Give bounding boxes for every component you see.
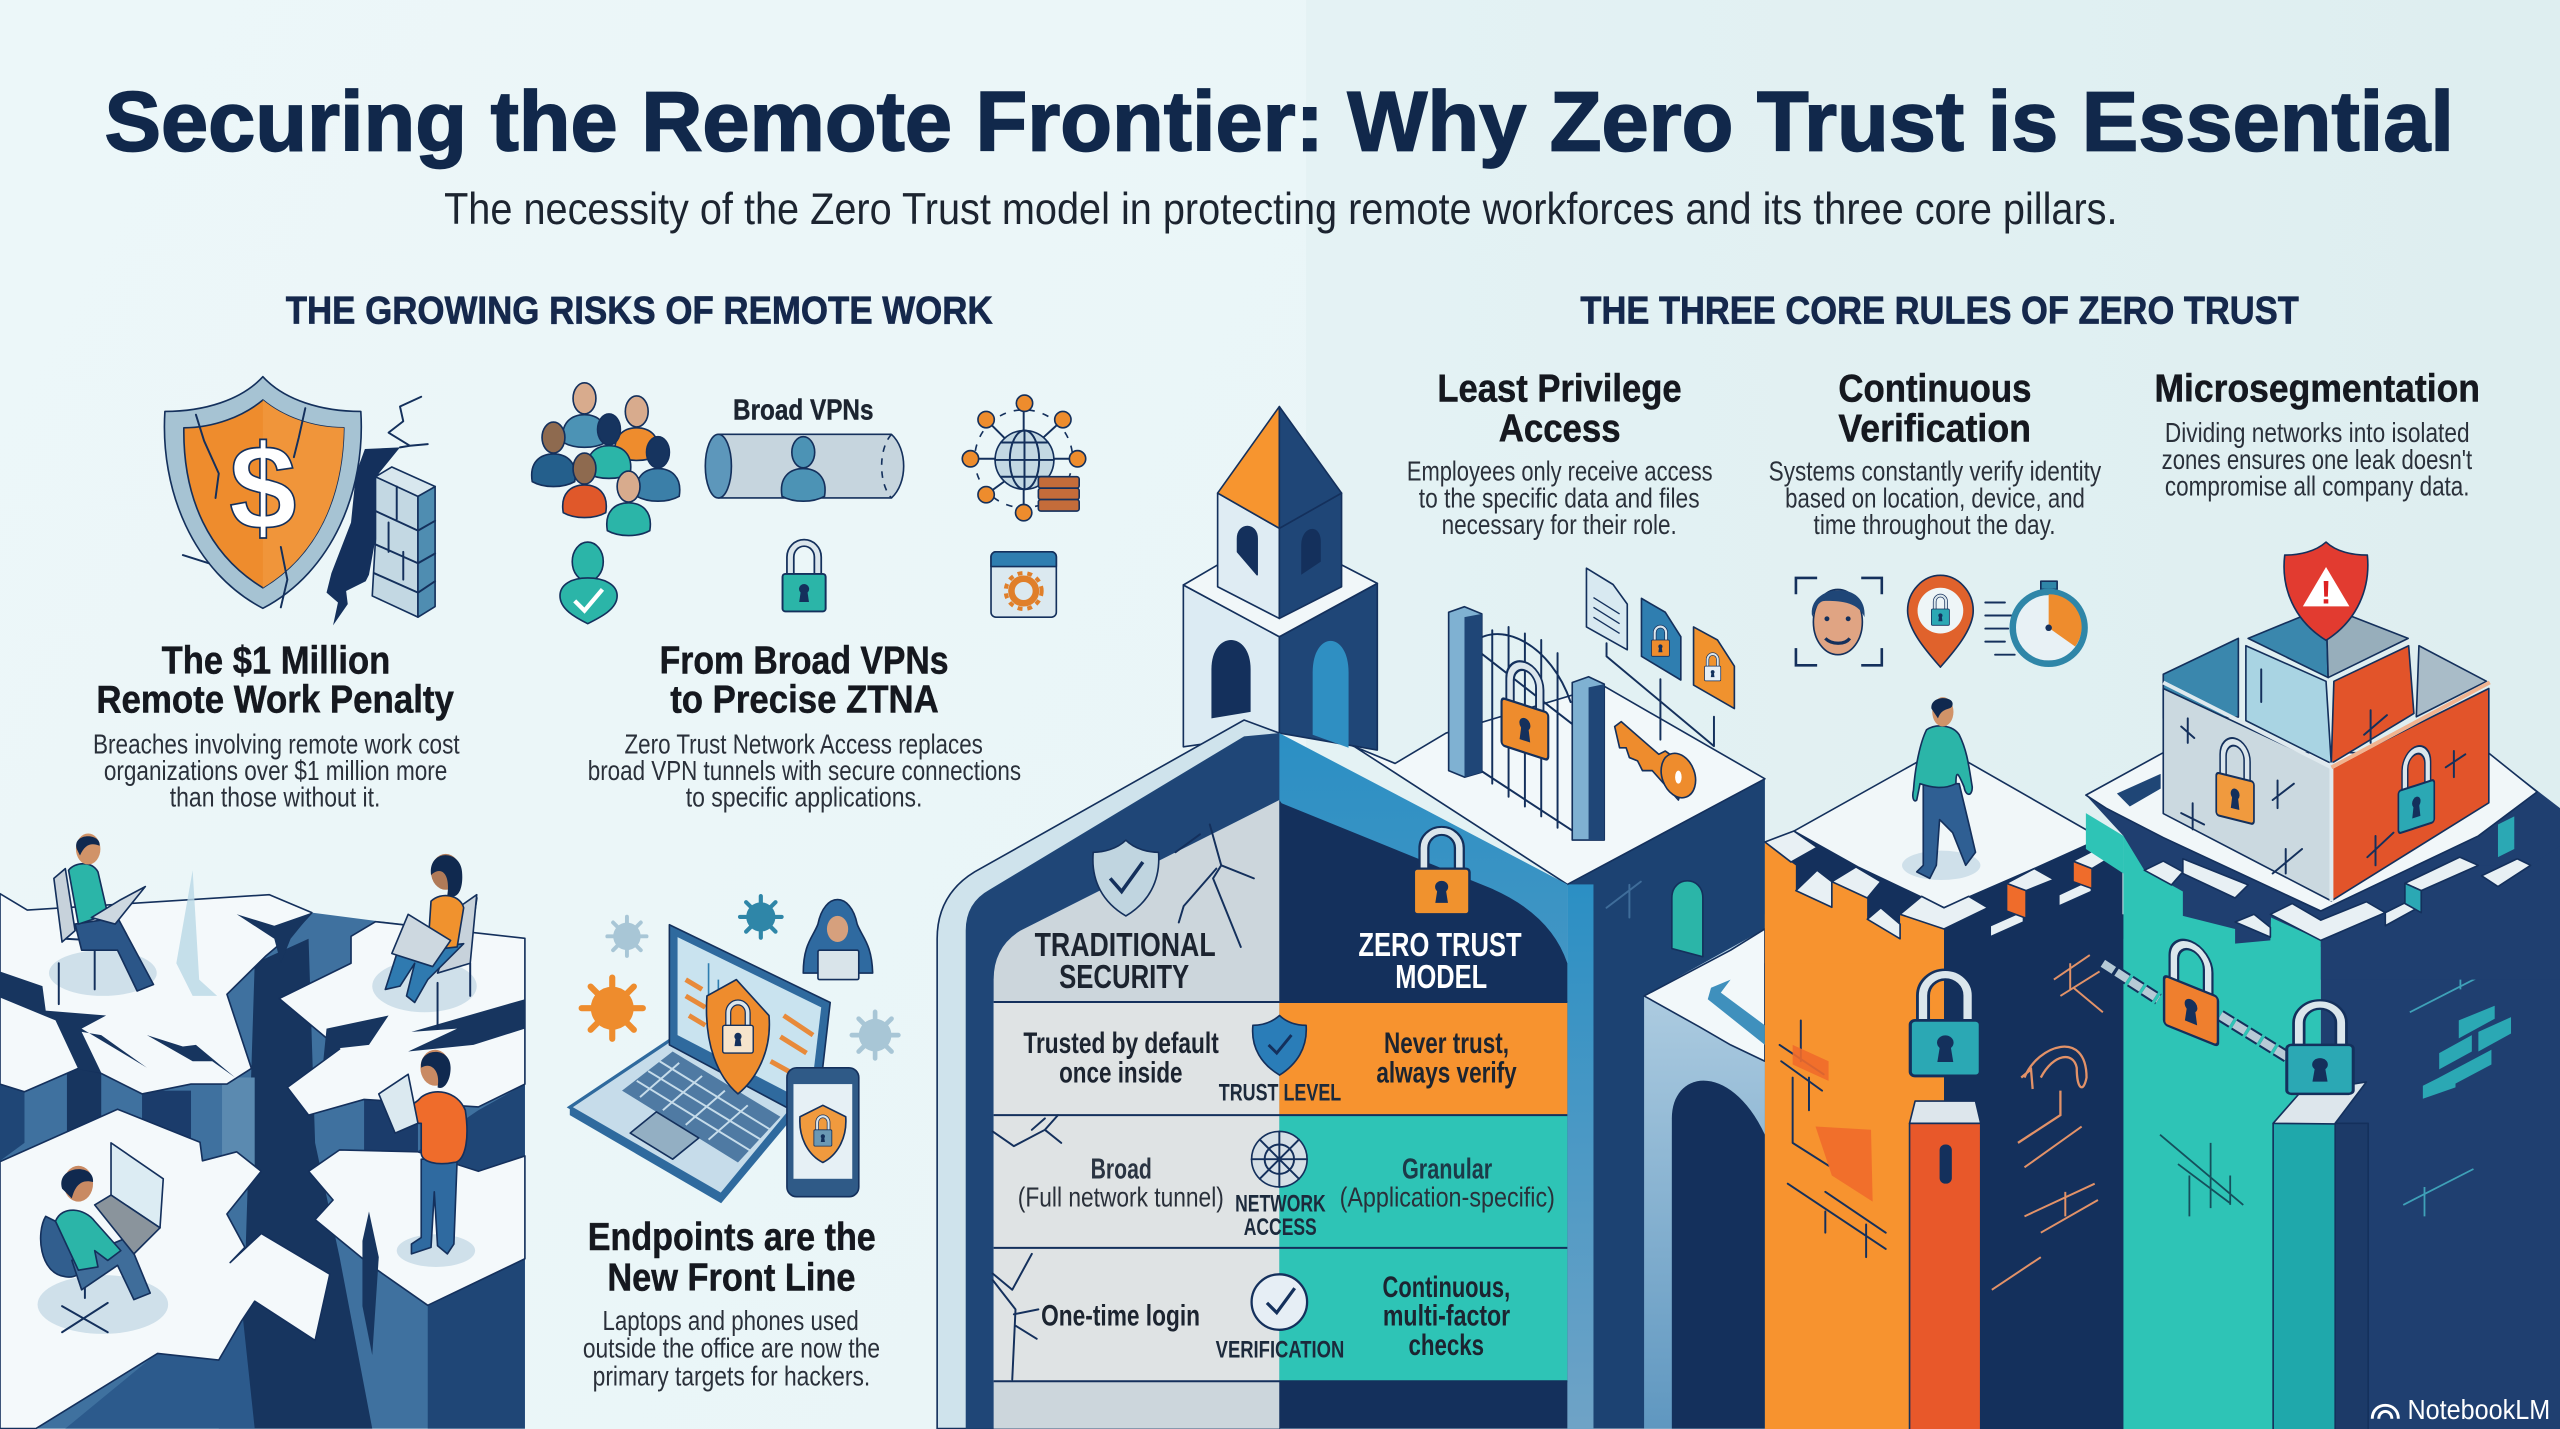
label: Broad VPNs: Broad VPNs <box>733 395 873 427</box>
body text <box>93 728 460 813</box>
panel: remote work penalty <box>93 377 460 813</box>
row: trust level: Trusted by default <box>1023 1027 1219 1060</box>
microsegmentation rule <box>2154 368 2480 502</box>
heading: Microsegmentation <box>2154 368 2480 411</box>
icon: hacker <box>803 900 873 980</box>
body text: than those without it. <box>170 782 380 813</box>
body text: to specific applications. <box>686 782 922 813</box>
body text: organizations over $1 million more <box>104 755 447 786</box>
body text <box>583 1305 880 1391</box>
body text <box>588 728 1021 813</box>
top-left ice plate <box>0 894 312 1094</box>
icon: documents <box>1586 568 1734 746</box>
icon: orange padlock <box>1414 831 1469 914</box>
heading: Endpoints are the <box>588 1216 876 1259</box>
icon: cracked shield and wall <box>164 377 435 625</box>
heading: least privilege: Least Privilege <box>1437 368 1682 411</box>
body text: primary targets for hackers. <box>593 1360 870 1391</box>
icon: VPN tunnel <box>705 434 904 501</box>
icon: grey shield <box>1093 840 1159 916</box>
row: network access: NETWORK <box>1235 1191 1326 1217</box>
icon: laptop with shield and phone <box>570 925 859 1203</box>
heading: least privilege: Access <box>1499 408 1621 451</box>
heading: continuous verification <box>1838 368 2032 451</box>
icon: padlock <box>783 543 826 611</box>
zero trust head: ZERO TRUST <box>1358 927 1522 964</box>
icon: stopwatch <box>1985 581 2085 664</box>
icon: network globe <box>962 395 1086 521</box>
icon: pale virus <box>607 917 647 956</box>
heading: to Precise ZTNA <box>670 679 939 722</box>
row: verification: checks <box>1408 1329 1484 1362</box>
subtitle: The necessity of the Zero Trust model in protecting remote workforces and its three core pillars. <box>444 185 2118 234</box>
navy tower <box>1944 914 2124 1429</box>
icon: red warning shield: ! <box>2321 573 2331 610</box>
blue tower <box>2321 939 2560 1429</box>
row: network access: Granular <box>1402 1153 1492 1185</box>
row: network access: (Application-specific) <box>1340 1182 1555 1213</box>
body text: Dividing networks into isolated <box>2165 417 2470 448</box>
row: verification: Continuous, <box>1383 1271 1510 1304</box>
heading <box>588 1216 876 1299</box>
lower-left ice plate <box>0 1109 330 1429</box>
top-right ice plate <box>279 922 525 1115</box>
figure: standing orange worker <box>379 1050 475 1267</box>
figure: seated worker at desk <box>38 1143 168 1334</box>
heading <box>660 639 949 722</box>
column heads <box>1035 927 1216 996</box>
body text: compromise all company data. <box>2165 471 2470 502</box>
row: trust level: TRUST LEVEL <box>1219 1080 1341 1106</box>
icon: face scan <box>1796 578 1882 665</box>
body text: time throughout the day. <box>1814 509 2056 540</box>
microsegmentation platform with battlements <box>2086 753 2560 980</box>
illustration: cracked ground with remote workers <box>0 833 525 1429</box>
icon: red warning shield <box>2284 542 2368 640</box>
icon: blue virus <box>740 896 782 938</box>
icon: orange virus <box>582 978 643 1039</box>
row: trust level: Never trust, <box>1384 1027 1509 1060</box>
heading: Remote Work Penalty <box>96 679 454 722</box>
figure: seated orange worker <box>372 854 477 1029</box>
icon: segmented data box <box>2163 542 2490 901</box>
icon: teal small tower with lock <box>2273 1082 2368 1429</box>
body text: zones ensures one leak doesn't <box>2162 444 2472 475</box>
row: network access <box>994 1115 1567 1248</box>
cracks <box>1176 824 1254 947</box>
heading: New Front Line <box>607 1256 856 1299</box>
row: verification: multi-factor <box>1383 1300 1510 1333</box>
heading: continuous verification: Continuous <box>1838 368 2032 411</box>
heading: From Broad VPNs <box>660 639 949 682</box>
heading: continuous verification: Verification <box>1838 408 2031 451</box>
row: verification <box>994 1248 1567 1381</box>
body text: Employees only receive access <box>1407 456 1713 487</box>
row: network access: ACCESS <box>1244 1215 1317 1241</box>
comparison hall <box>937 720 1567 1429</box>
teal tower <box>2123 939 2321 1429</box>
zero trust head: MODEL <box>1395 959 1487 996</box>
icon: teal padlock <box>2398 744 2434 834</box>
lower-right ice plate <box>309 1150 525 1305</box>
person platform with battlements <box>1765 748 2122 963</box>
body text: necessary for their role. <box>1442 509 1677 540</box>
body text: Breaches involving remote work cost <box>93 728 460 759</box>
icon: pale virus right <box>852 1012 898 1058</box>
watchtower <box>1183 407 1377 750</box>
row: trust level <box>994 1002 1567 1115</box>
heading <box>96 639 454 722</box>
body text <box>2162 417 2472 502</box>
heading: least privilege <box>1437 368 1682 451</box>
castle illustration: right rules <box>1313 542 2560 1429</box>
body text: Laptops and phones used <box>602 1305 859 1336</box>
icon: orange padlock <box>2216 737 2254 824</box>
icon: red tower with lock <box>1910 975 1981 1429</box>
icon: app window <box>991 552 1056 617</box>
orange tower <box>1765 914 1944 1429</box>
body text: broad VPN tunnels with secure connections <box>588 755 1021 786</box>
icon: key <box>1615 722 1702 803</box>
lower bridge block <box>1644 929 1765 1429</box>
zero trust head <box>1358 927 1522 996</box>
body text: to the specific data and files <box>1419 482 1700 513</box>
heading: growing risks: THE GROWING RISKS OF REMOTE WORK <box>286 289 993 332</box>
icon: verified user <box>560 542 617 624</box>
title: Securing the Remote Frontier: Why Zero Trust is Essential <box>104 74 2454 169</box>
row: network access: Broad <box>1091 1153 1152 1185</box>
gate platform block <box>1313 686 1765 1429</box>
row: network access: (Full network tunnel) <box>1018 1182 1224 1213</box>
body text: outside the office are now the <box>583 1333 880 1364</box>
row: verification: VERIFICATION <box>1216 1338 1344 1364</box>
icon: cracked shield and wall: $ <box>229 420 296 555</box>
body text <box>1407 456 1713 540</box>
body text: Systems constantly verify identity <box>1769 456 2101 487</box>
panel: broad VPNs to ZTNA <box>532 383 1086 813</box>
icon: gate <box>1449 607 1604 840</box>
body text: based on location, device, and <box>1785 482 2085 513</box>
icon: crowd of users <box>532 383 680 536</box>
figure: seated teal worker <box>49 833 157 1004</box>
heading: The $1 Million <box>162 639 390 682</box>
row: verification: One-time login <box>1041 1300 1200 1333</box>
gate rule <box>1407 368 1734 840</box>
column heads: TRADITIONAL <box>1035 927 1216 964</box>
column heads: SECURITY <box>1059 959 1189 996</box>
body text <box>1769 456 2101 540</box>
verification rule <box>1769 368 2101 667</box>
figure: walking person <box>1902 697 1980 880</box>
row: trust level: always verify <box>1376 1056 1517 1089</box>
row: trust level: once inside <box>1059 1056 1183 1089</box>
heading: core rules: THE THREE CORE RULES OF ZERO TRUST <box>1580 289 2299 332</box>
icon: chain with orange padlock <box>2103 935 2353 1094</box>
icon: location pin <box>1908 575 1973 667</box>
body text: Zero Trust Network Access replaces <box>624 728 983 759</box>
panel: endpoints <box>570 896 898 1391</box>
